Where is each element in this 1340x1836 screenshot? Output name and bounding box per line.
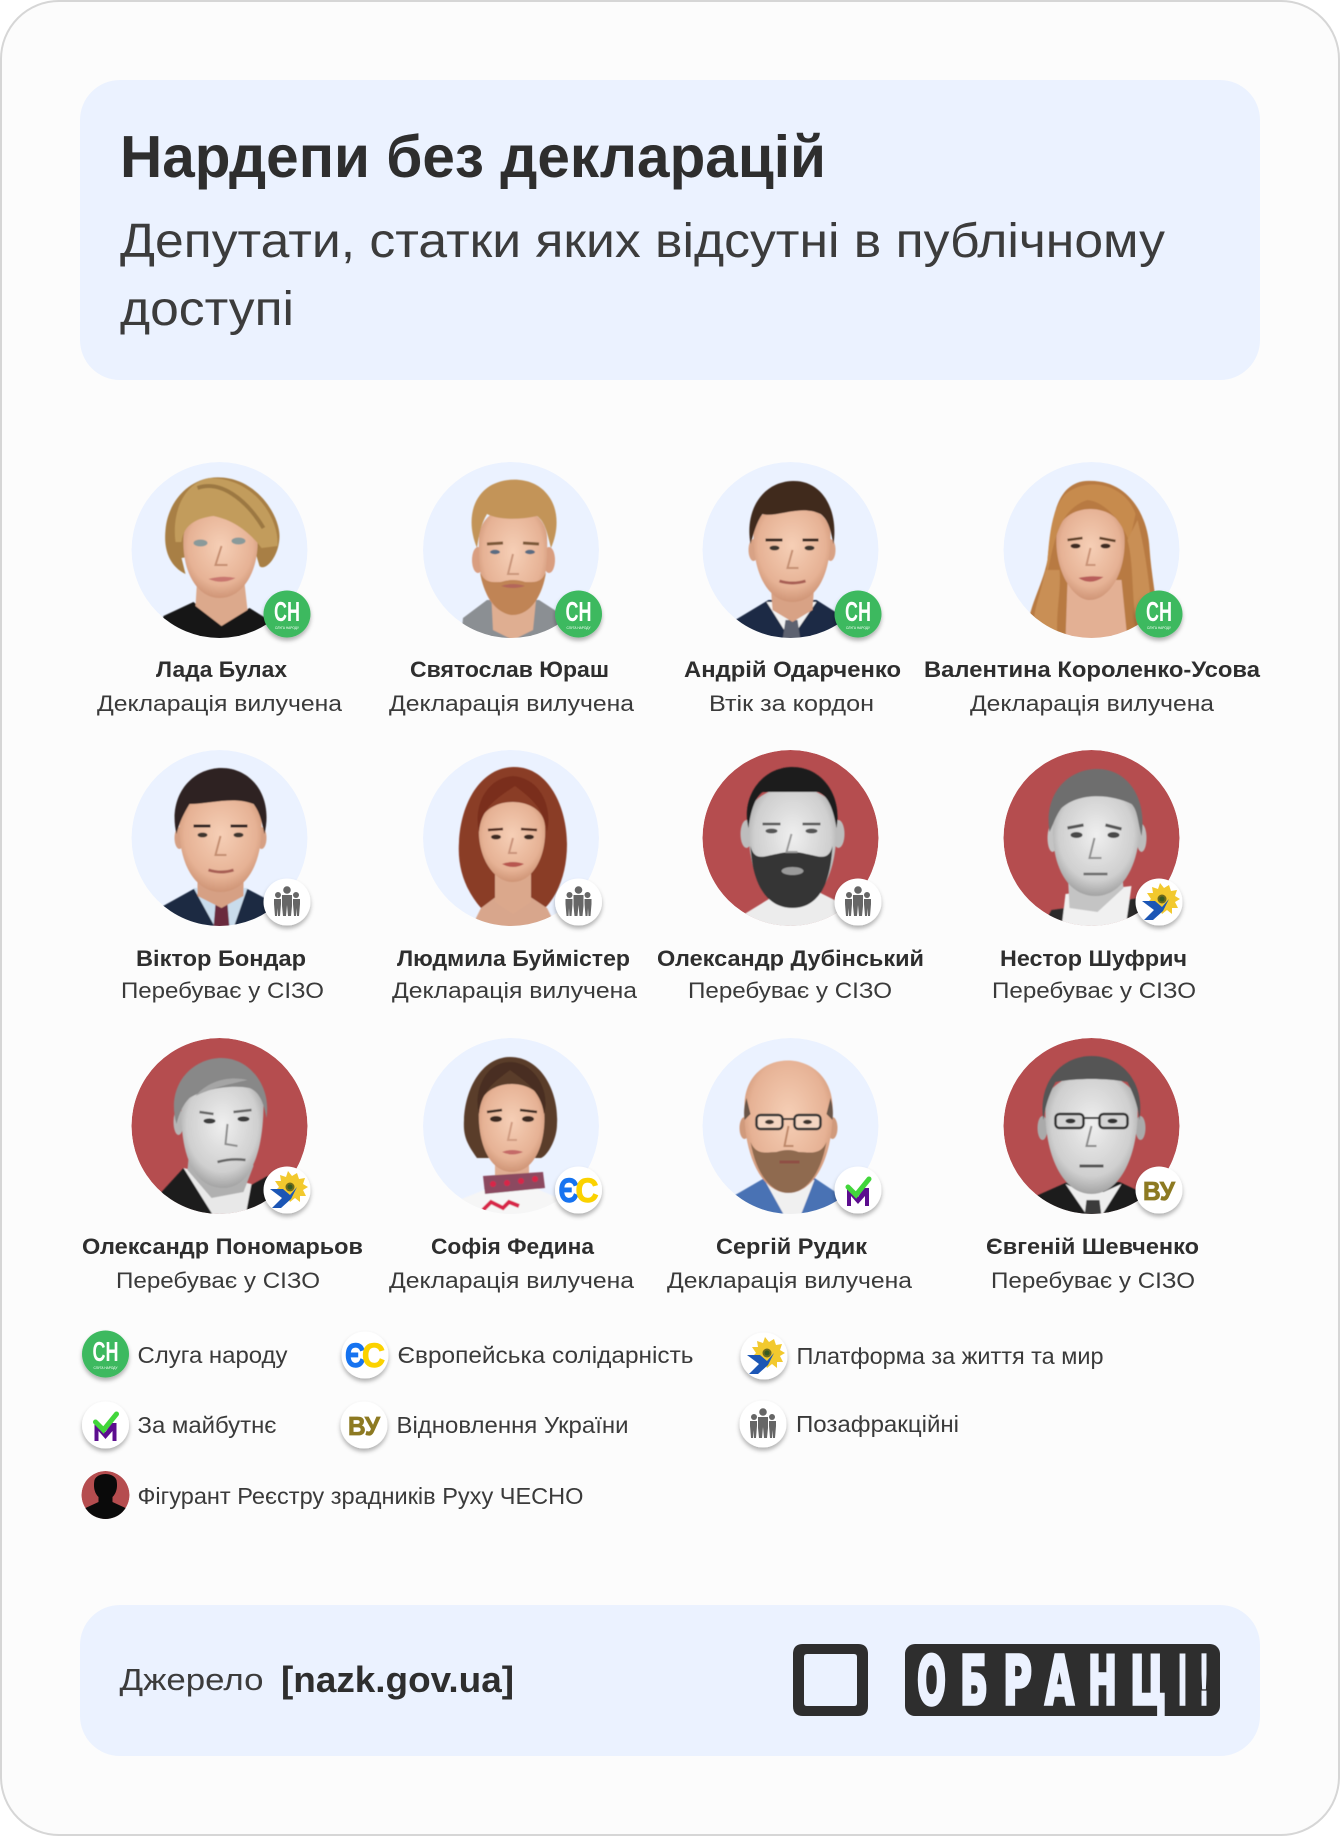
person: Віктор Бондар <box>121 750 324 1003</box>
portrait <box>1004 462 1180 640</box>
portrait <box>702 462 878 640</box>
party badge: Платформа за життя та мир <box>264 1166 310 1214</box>
logo: checkbox <box>793 1644 868 1716</box>
status: Перебуває у СІЗО <box>116 1268 320 1293</box>
source label: Джерело <box>120 1662 264 1697</box>
portrait <box>132 1038 308 1216</box>
status: Декларація вилучена <box>389 691 635 716</box>
name: Сергій Рудик <box>716 1234 868 1259</box>
person: Сергій Рудик <box>667 1038 913 1293</box>
title: Нардепи без декларацій <box>120 124 826 190</box>
party badge: Слуга народу: СЛУГА НАРОДУ <box>1147 625 1171 630</box>
name: Олександр Дубінський <box>657 946 924 971</box>
party badge: Слуга народу: СН <box>274 596 300 627</box>
party badge: Платформа за життя та мир <box>1136 878 1182 926</box>
portrait <box>132 462 308 640</box>
status: Декларація вилучена <box>667 1268 913 1293</box>
legend item: Фігурант Реєстру зрадників Руху ЧЕСНО: Фігурант Реєстру зрадників Руху ЧЕСНО <box>138 1483 584 1509</box>
portrait <box>423 1038 599 1216</box>
legend item: Слуга народу: СН <box>92 1336 118 1367</box>
legend item: Європейська солідарність: Є <box>345 1337 365 1375</box>
party badge: Слуга народу: СЛУГА НАРОДУ <box>275 625 299 630</box>
party badge: Слуга народу <box>834 590 882 638</box>
person: Олександр Пономарьов <box>82 1038 363 1293</box>
party badge: Слуга народу <box>555 590 602 638</box>
logo: wordmark: О <box>917 1642 946 1720</box>
legend item: За майбутнє <box>82 1402 277 1448</box>
footer panel <box>80 1605 1260 1756</box>
portrait <box>1004 1038 1180 1216</box>
status: Перебуває у СІЗО <box>991 1268 1195 1293</box>
name: Лада Булах <box>156 657 287 682</box>
legend item: Позафракційні: Позафракційні <box>796 1411 959 1437</box>
party badge: За майбутнє <box>834 1166 882 1214</box>
person: Валентина Короленко-Усова <box>924 462 1261 716</box>
legend item: Європейська солідарність: Європейська солідарність <box>398 1342 694 1368</box>
party badge: Європейська солідарність: Є <box>558 1172 578 1210</box>
status: Декларація вилучена <box>97 691 343 716</box>
name: Олександр Пономарьов <box>82 1234 363 1259</box>
logo: wordmark: І <box>1178 1642 1187 1720</box>
person: Святослав Юраш <box>389 462 635 716</box>
party badge: Позафракційні <box>264 878 310 926</box>
status: Декларація вилучена <box>970 691 1215 716</box>
logo: wordmark: А <box>1045 1642 1074 1720</box>
legend item: Платформа за життя та мир <box>740 1332 1104 1380</box>
person: Лада Булах <box>97 462 343 716</box>
name: Валентина Короленко-Усова <box>924 657 1261 682</box>
portrait <box>702 1038 878 1216</box>
name: Андрій Одарченко <box>684 657 901 682</box>
party badge: Слуга народу: СН <box>566 596 592 627</box>
legend item: Слуга народу <box>82 1330 288 1378</box>
party badge: Слуга народу: СН <box>1146 596 1172 627</box>
status: Декларація вилучена <box>392 978 638 1003</box>
party badge: Позафракційні <box>834 878 882 926</box>
name: Євгеній Шевченко <box>986 1234 1199 1259</box>
legend item: Позафракційні <box>740 1400 959 1448</box>
legend <box>82 1330 1104 1519</box>
header panel <box>80 80 1260 380</box>
name: Нестор Шуфрич <box>1000 946 1187 971</box>
legend item: Відновлення України <box>340 1402 628 1448</box>
party badge: Слуга народу <box>264 590 310 638</box>
name: Святослав Юраш <box>410 657 609 682</box>
status: Втік за кордон <box>709 691 874 716</box>
legend item: Слуга народу: Слуга народу <box>138 1342 288 1368</box>
legend item: Відновлення України: ВУ <box>348 1411 381 1441</box>
source link: [nazk.gov.ua] <box>281 1659 514 1700</box>
logo: wordmark: Н <box>1088 1642 1117 1720</box>
party badge: Європейська солідарність <box>555 1166 602 1214</box>
party badge: Слуга народу: СЛУГА НАРОДУ <box>566 625 591 630</box>
logo: wordmark <box>905 1642 1220 1720</box>
party badge: Слуга народу <box>1136 590 1182 638</box>
name: Софія Федина <box>431 1234 594 1259</box>
person: Олександр Дубінський <box>657 750 924 1003</box>
person: Людмила Буймістер <box>392 750 638 1003</box>
legend item: Європейська солідарність: С <box>362 1337 385 1375</box>
status: Перебуває у СІЗО <box>992 978 1196 1003</box>
portrait <box>702 750 878 928</box>
portrait <box>423 750 599 928</box>
subtitle: доступі <box>120 283 294 336</box>
portrait <box>423 462 599 640</box>
logo: wordmark: Б <box>960 1642 988 1720</box>
status: Перебуває у СІЗО <box>121 978 324 1003</box>
party badge: Відновлення України <box>1136 1166 1182 1214</box>
legend item: Платформа за життя та мир: Платформа за життя та мир <box>796 1343 1104 1369</box>
person: Софія Федина <box>389 1038 635 1293</box>
party badge: Слуга народу: СЛУГА НАРОДУ <box>846 625 870 630</box>
logo: wordmark: Р <box>1003 1642 1032 1720</box>
logo: wordmark: Ц <box>1130 1642 1166 1720</box>
person: Нестор Шуфрич <box>992 750 1196 1003</box>
legend item: Слуга народу: СЛУГА НАРОДУ <box>94 1365 118 1370</box>
logo: wordmark: ! <box>1199 1642 1209 1720</box>
person: Андрій Одарченко <box>684 462 901 716</box>
party badge: Відновлення України: ВУ <box>1143 1176 1176 1206</box>
portrait <box>1004 750 1180 928</box>
legend item: За майбутнє: За майбутнє <box>138 1412 277 1438</box>
status: Декларація вилучена <box>389 1268 635 1293</box>
legend item: Фігурант Реєстру зрадників Руху ЧЕСНО <box>82 1471 584 1519</box>
legend item: Відновлення України: Відновлення України <box>396 1412 628 1438</box>
party badge: Позафракційні <box>555 878 602 926</box>
subtitle: Депутати, статки яких відсутні в публічному <box>120 215 1165 268</box>
person: Євгеній Шевченко <box>986 1038 1199 1293</box>
name: Людмила Буймістер <box>397 946 630 971</box>
portrait <box>132 750 308 928</box>
party badge: Слуга народу: СН <box>845 596 871 627</box>
status: Перебуває у СІЗО <box>688 978 892 1003</box>
legend item: Європейська солідарність <box>342 1332 694 1378</box>
party badge: Європейська солідарність: С <box>576 1172 598 1210</box>
name: Віктор Бондар <box>136 946 306 971</box>
